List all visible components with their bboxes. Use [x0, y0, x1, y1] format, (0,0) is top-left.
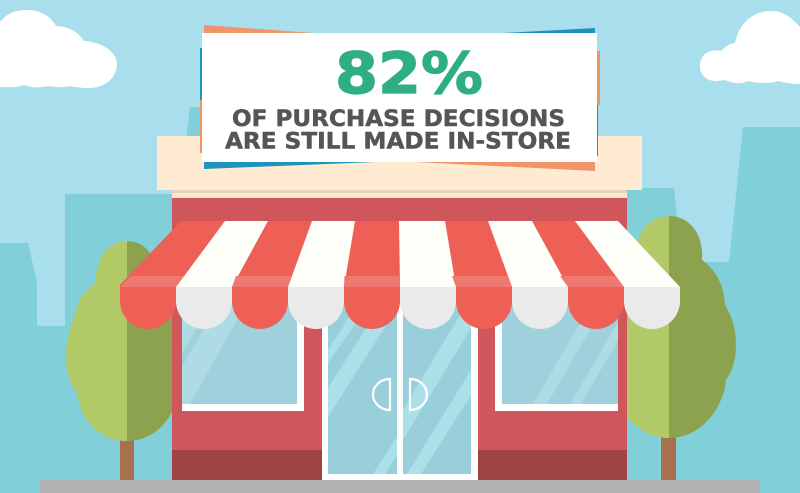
fascia shadow: [172, 190, 627, 193]
subheading line 1: OF PURCHASE DECISIONS: [232, 107, 565, 132]
sidewalk: [40, 480, 760, 493]
ribbon top left: [204, 25, 313, 33]
city skyline: [0, 107, 800, 493]
glass doors: [322, 300, 488, 480]
red stripes: [120, 221, 624, 287]
canopy dark half: [127, 241, 188, 441]
ribbon left orange: [200, 100, 203, 153]
sign: [200, 25, 600, 171]
right tree: [602, 216, 736, 482]
left cloud: [0, 10, 117, 88]
headline number: 82%: [335, 41, 483, 107]
glass: [502, 300, 618, 404]
trunk: [120, 438, 134, 482]
canopy dark half: [669, 216, 736, 438]
grey scallops: [176, 287, 680, 329]
base band: [172, 450, 627, 480]
store wall: [172, 198, 627, 480]
store building: [157, 136, 642, 480]
right door glass: [403, 300, 471, 474]
frame: [495, 300, 618, 411]
canopy light half: [602, 216, 669, 438]
door frame: [322, 300, 478, 480]
ribbon right orange: [596, 51, 600, 105]
left door glass: [328, 300, 397, 474]
ribbon left blue: [200, 48, 203, 100]
left door handle: [373, 379, 390, 410]
sign panel: [202, 33, 597, 162]
subheading line 2: ARE STILL MADE IN-STORE: [225, 130, 571, 154]
right window: [495, 302, 618, 411]
ribbon right blue: [596, 105, 598, 156]
white stripes: [176, 221, 680, 287]
ribbon bottom left: [204, 161, 400, 169]
ribbon bottom right: [395, 161, 595, 171]
right cloud: [700, 11, 800, 84]
canopy light half: [66, 241, 127, 441]
striped awning: [120, 221, 680, 329]
left window: [182, 300, 304, 411]
glass shine: [533, 323, 618, 404]
glass shine: [182, 305, 238, 404]
left door shine: [328, 318, 397, 474]
cream fascia strip: [172, 190, 627, 198]
cream roof: [157, 136, 642, 190]
left tree: [66, 241, 188, 482]
right door handle: [410, 379, 427, 410]
light band on red stripes: [120, 276, 624, 287]
glass: [182, 300, 297, 404]
red scallops: [120, 287, 624, 329]
frame: [182, 300, 304, 411]
right door shine: [403, 316, 471, 474]
trunk: [661, 435, 676, 482]
ribbon top right: [503, 28, 595, 33]
